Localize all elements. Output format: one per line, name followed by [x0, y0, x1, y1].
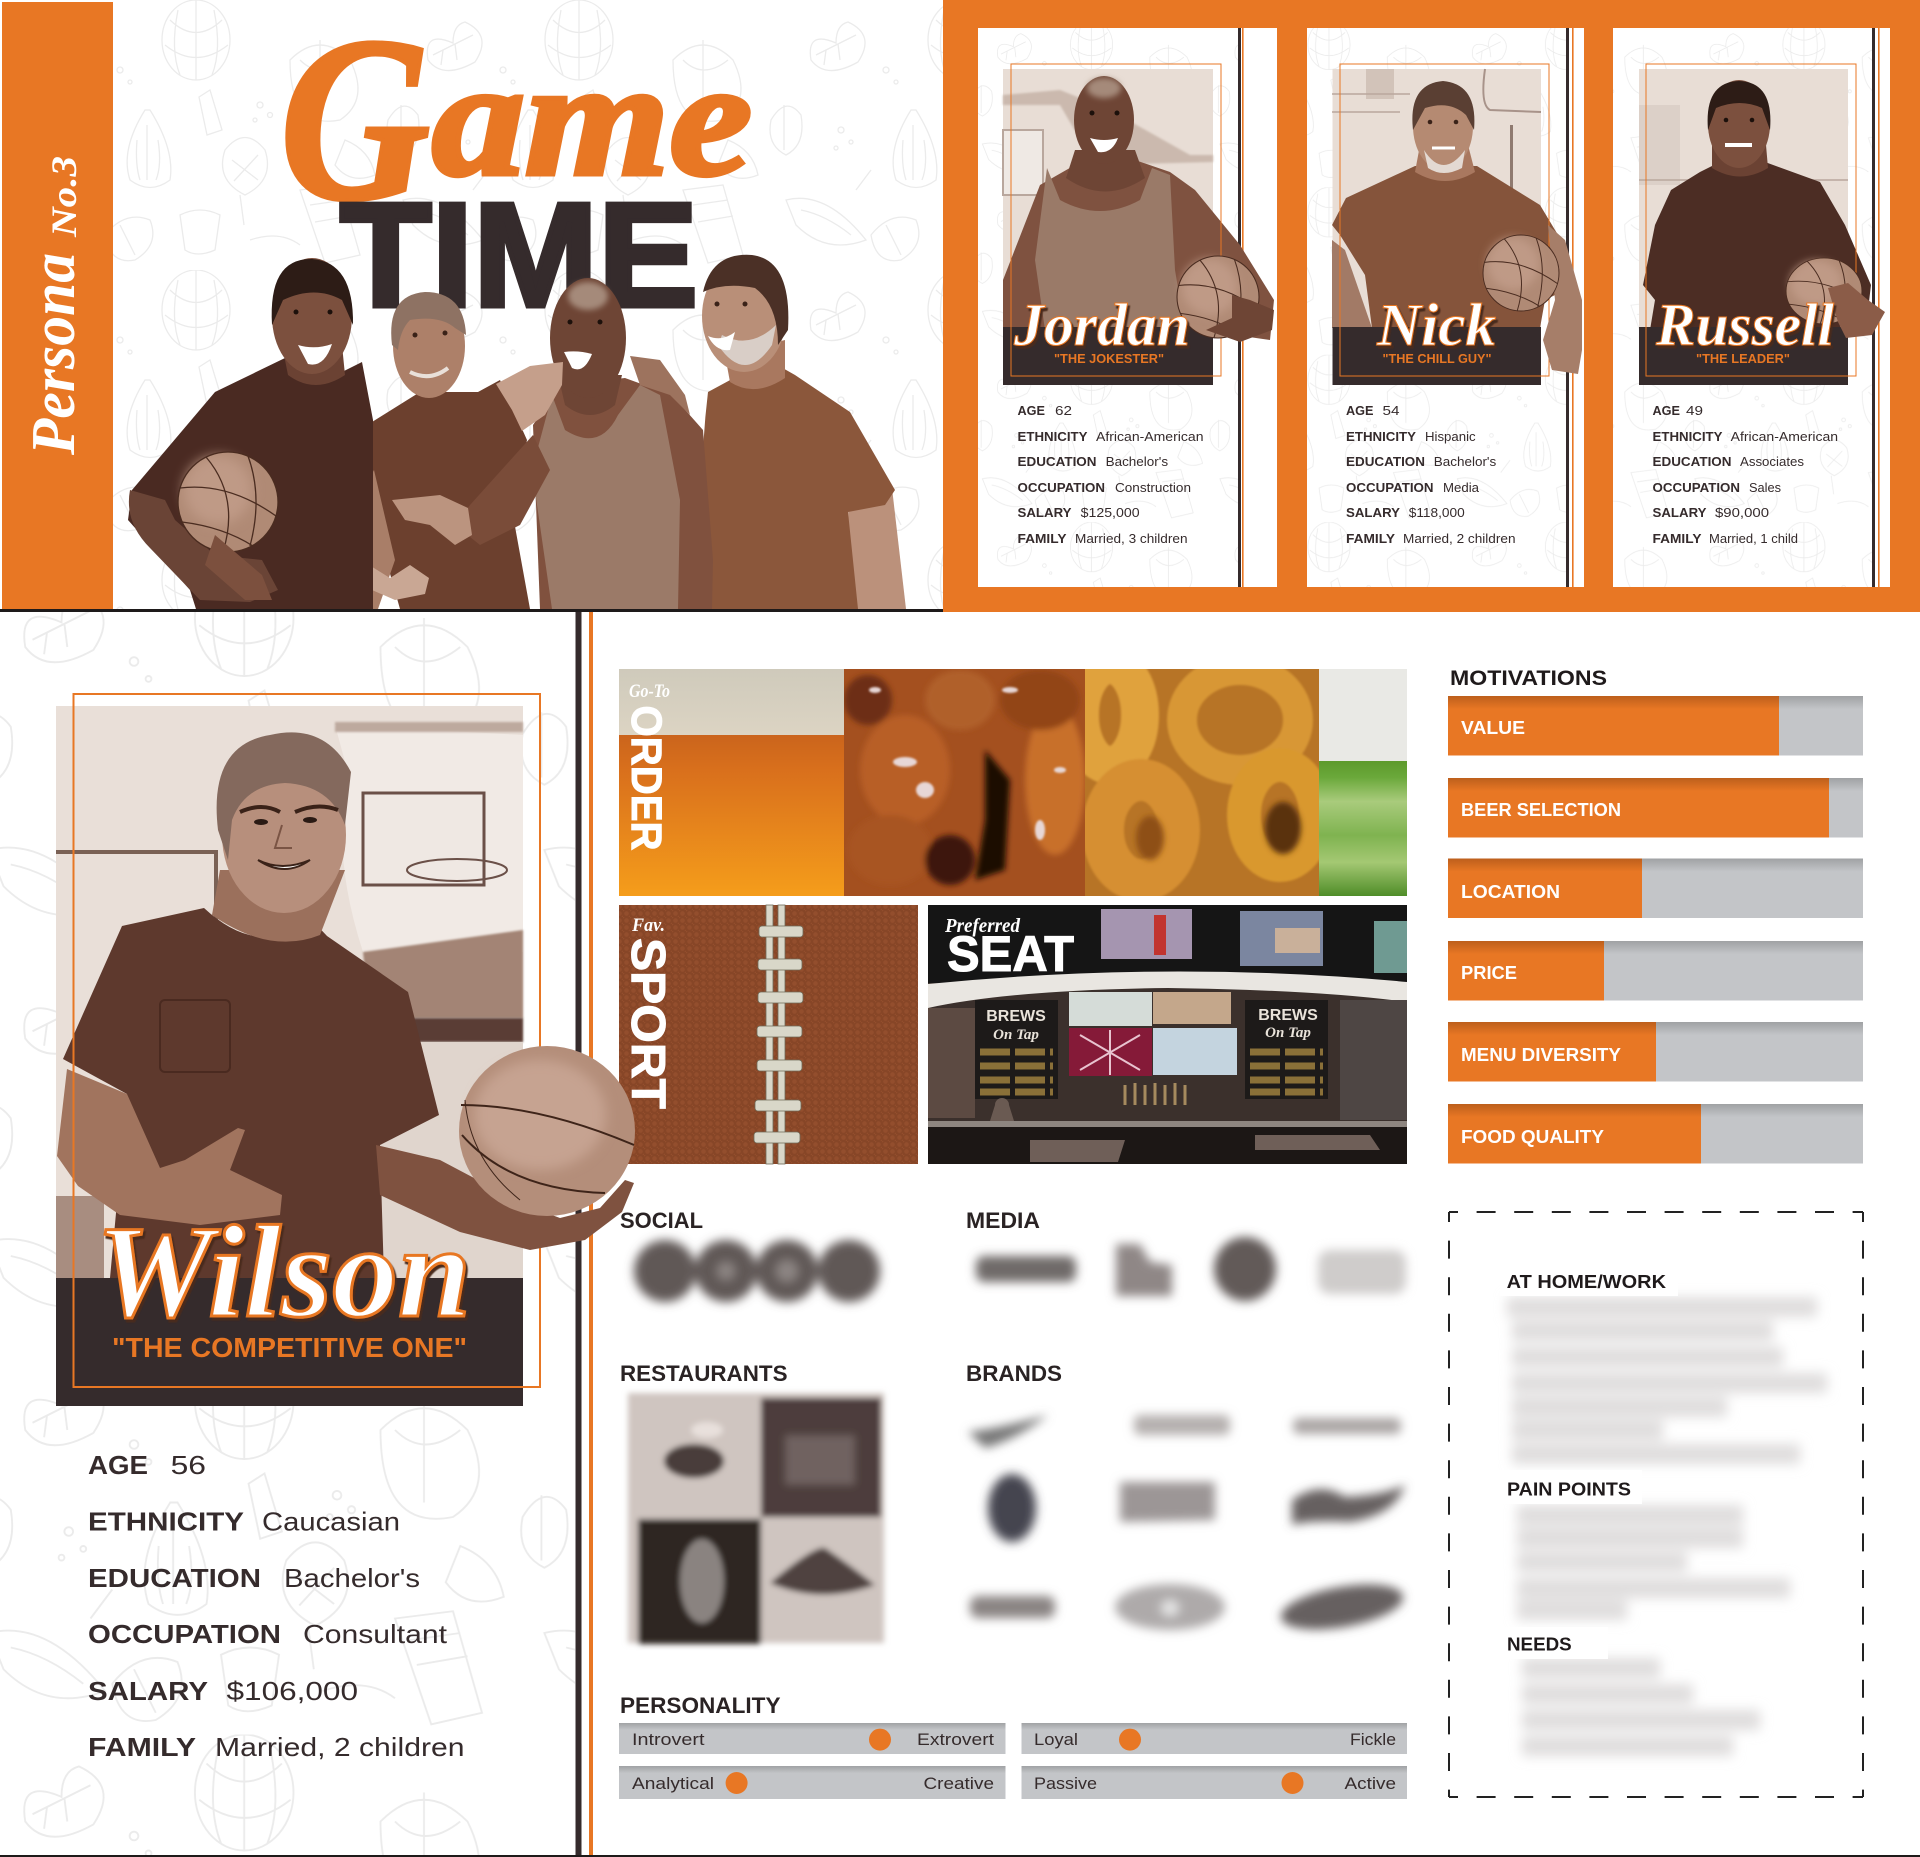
nickname: "THE COMPETITIVE ONE" [112, 1332, 467, 1363]
stats: ETHNICITY [1018, 430, 1088, 444]
left forearm [352, 470, 395, 609]
panel: social: SOCIAL [620, 1208, 703, 1233]
stats: Wilson: FAMILY [88, 1732, 196, 1762]
photo: wings [844, 669, 1085, 896]
dark name band [56, 1278, 523, 1406]
nickname: "THE CHILL GUY" [1382, 352, 1492, 366]
brews board left [975, 1000, 1058, 1099]
bartender [990, 1098, 1014, 1121]
stats: FAMILY [1652, 532, 1702, 546]
stats: Wilson: Consultant [303, 1619, 448, 1649]
name: Jordan: Jordan [1013, 292, 1190, 358]
stats: Wilson: ETHNICITY [88, 1506, 244, 1536]
panel: brands: BRANDS [966, 1361, 1062, 1386]
bar: location [1448, 858, 1863, 918]
panel: persona title [0, 0, 943, 610]
card: Russell [1613, 28, 1890, 587]
slider: passive to active [1022, 1766, 1407, 1799]
stats: Hispanic [1425, 430, 1476, 444]
stats: Media [1443, 481, 1479, 495]
orange frame [74, 694, 540, 1387]
brews board right [1245, 1000, 1328, 1099]
stats: 54 [1382, 404, 1400, 418]
bar: beer selection [1448, 778, 1863, 838]
panel: food order photos [619, 665, 1407, 896]
stats [1018, 404, 1204, 546]
man 3 [532, 278, 713, 609]
heading: needs [1500, 1627, 1608, 1659]
blurred brand logos [968, 1415, 1407, 1637]
title: Game: ame [432, 27, 752, 210]
panel: motivations: MOTIVATIONS [1450, 667, 1607, 690]
torso [63, 908, 439, 1278]
panel: restaurants [620, 1361, 884, 1644]
stats: OCCUPATION [1018, 481, 1105, 495]
label: Preferred Seat: Preferred [944, 915, 1021, 937]
stats: $125,000 [1081, 506, 1140, 520]
stats: SALARY [1652, 506, 1707, 520]
label: Go-To Order: ORDER [622, 706, 670, 850]
label: Go-To Order: Go-To [629, 681, 670, 702]
photo: ranch and celery [1319, 669, 1407, 896]
title: TIME: TIME [340, 173, 698, 338]
slider: analytical to creative: Analytical [632, 1774, 714, 1793]
stats: Wilson: AGE [88, 1450, 148, 1480]
portrait [1639, 64, 1885, 385]
stats [1652, 404, 1838, 546]
stats: OCCUPATION [1652, 481, 1740, 495]
laces [754, 905, 803, 1164]
panel: three persona cards [943, 0, 1920, 612]
taps [1125, 1083, 1185, 1105]
divider: top rule [0, 609, 943, 612]
panel: Wilson portrait [56, 694, 635, 1406]
man 4 [702, 255, 906, 609]
blurred media logos [976, 1237, 1406, 1301]
stats: Wilson: EDUCATION [88, 1563, 261, 1593]
bar: location: LOCATION [1461, 882, 1560, 902]
bar: food quality: FOOD QUALITY [1461, 1127, 1604, 1147]
bar: value [1448, 696, 1863, 756]
stats: EDUCATION [1018, 455, 1096, 469]
stats: Married, 3 children [1075, 532, 1188, 546]
stats: $90,000 [1715, 506, 1769, 520]
slider: introvert to extrovert [619, 1723, 1006, 1754]
court background [56, 722, 523, 1278]
stats: EDUCATION [1346, 455, 1425, 469]
panel: Wilson background [0, 612, 575, 1857]
side strip: persona number: No.3 [44, 156, 84, 238]
stats: ETHNICITY [1346, 430, 1417, 444]
bar: food quality [1448, 1104, 1863, 1164]
arm of man 3 across [455, 435, 550, 545]
basketball [459, 1046, 635, 1216]
photo: football [619, 905, 918, 1164]
panel: media [966, 1208, 1406, 1301]
bar counter and tables [928, 1124, 1407, 1164]
slider: introvert to extrovert: Introvert [632, 1730, 705, 1749]
blurred social icons [634, 1240, 880, 1302]
name: Wilson: Wilson [96, 1198, 471, 1345]
slider: passive to active: Active [1344, 1774, 1396, 1793]
stats: EDUCATION [1652, 455, 1732, 469]
centre screens [1069, 992, 1152, 1026]
brews board left: BREWS [986, 1008, 1046, 1025]
stats: Bachelor's [1434, 455, 1496, 469]
stats: AGE [1652, 404, 1680, 418]
nickname: "THE LEADER" [1696, 352, 1790, 366]
hand on shoulder [630, 356, 690, 415]
side strip: persona number: Persona [20, 253, 88, 456]
slider: introvert to extrovert: Extrovert [917, 1730, 994, 1749]
label: Fav. Sport: Fav. [631, 915, 665, 936]
panel: restaurants: RESTAURANTS [620, 1361, 788, 1386]
slider: loyal to fickle: Fickle [1350, 1730, 1396, 1749]
nickname: "THE JOKESTER" [1054, 352, 1164, 366]
left arm and hand [57, 1069, 282, 1225]
stats: AGE [1346, 404, 1374, 418]
bar: price [1448, 941, 1863, 1000]
stats [1346, 404, 1516, 546]
name: Nick: Nick [1376, 292, 1496, 358]
heading: pain points [1500, 1470, 1642, 1504]
blurred note lines [1507, 1297, 1827, 1756]
stats: Wilson: $106,000 [226, 1676, 358, 1706]
heading: at home/work [1500, 1270, 1678, 1296]
bar: beer selection: BEER SELECTION [1461, 800, 1621, 820]
stats: African-American [1096, 430, 1204, 444]
photo: beer [619, 669, 844, 896]
stats: Bachelor's [1106, 455, 1168, 469]
stats: Associates [1740, 455, 1804, 469]
panel: media: MEDIA [966, 1208, 1040, 1233]
brews board right: On Tap [1265, 1025, 1311, 1041]
bar: price: PRICE [1461, 963, 1517, 983]
stats: AGE [1018, 404, 1045, 418]
right arm and hand [376, 1145, 634, 1250]
panel: personality: PERSONALITY [620, 1693, 781, 1718]
side strip: persona number [2, 2, 113, 610]
portrait [1003, 64, 1274, 385]
panel: dashed notes box [1449, 1212, 1863, 1797]
bar: menu diversity: MENU DIVERSITY [1461, 1045, 1621, 1065]
blurred restaurant logos [628, 1393, 884, 1644]
label: Preferred Seat: SEAT [947, 926, 1074, 982]
stats: Sales [1749, 481, 1781, 495]
panel: motivations [1448, 667, 1863, 1164]
divider: bottom rule [0, 1855, 1920, 1857]
stats: Wilson: OCCUPATION [88, 1619, 281, 1649]
ceiling band [928, 971, 1407, 1008]
stats: Wilson [88, 1450, 464, 1762]
stats: African-American [1731, 430, 1838, 444]
stats: 49 [1686, 404, 1703, 418]
stats: Married, 2 children [1403, 532, 1516, 546]
heading: at home/work: AT HOME/WORK [1507, 1271, 1667, 1292]
stats: Construction [1115, 481, 1191, 495]
slider: passive to active: Passive [1034, 1774, 1097, 1793]
stats: Wilson: SALARY [88, 1676, 208, 1706]
side wall [928, 1008, 975, 1118]
name: Russell: Russell [1655, 292, 1834, 358]
panel: personality [619, 1693, 1407, 1799]
group photo of four men [128, 255, 906, 609]
photo: preferred seat bar [928, 905, 1407, 1164]
brews board left: On Tap [993, 1027, 1039, 1043]
stats: Wilson: Married, 2 children [215, 1732, 464, 1762]
title: Game [280, 0, 752, 249]
divider: orange rule [589, 612, 593, 1857]
upper screens [1101, 909, 1192, 959]
stats: ETHNICITY [1652, 430, 1723, 444]
stats: 62 [1055, 404, 1072, 418]
photo: onion rings [1080, 665, 1319, 896]
stats: FAMILY [1346, 532, 1396, 546]
stats: Wilson: 56 [171, 1450, 206, 1480]
heading: needs: NEEDS [1507, 1634, 1572, 1655]
slider: loyal to fickle [1022, 1723, 1407, 1754]
portrait [1332, 64, 1582, 385]
bar: value: VALUE [1461, 718, 1525, 738]
slider: analytical to creative [619, 1766, 1006, 1799]
man 2 [352, 292, 563, 609]
card: Nick [1307, 28, 1584, 587]
label: Fav. Sport: SPORT [621, 938, 674, 1109]
bar: menu diversity [1448, 1022, 1863, 1082]
card: Jordan [978, 28, 1277, 587]
neck and head [212, 732, 351, 942]
stats: Married, 1 child [1709, 532, 1798, 546]
stats: OCCUPATION [1346, 481, 1434, 495]
stats: Wilson: Caucasian [262, 1506, 400, 1536]
slider: loyal to fickle: Loyal [1034, 1730, 1078, 1749]
man 1 with basketball [128, 258, 373, 609]
stats: SALARY [1346, 506, 1401, 520]
slider: analytical to creative: Creative [924, 1774, 994, 1793]
divider: dark rule [576, 612, 582, 1857]
stats: $118,000 [1409, 506, 1465, 520]
panel: brands [966, 1361, 1407, 1637]
stats: FAMILY [1018, 532, 1067, 546]
hands [392, 495, 472, 545]
stats: SALARY [1018, 506, 1072, 520]
brews board right: BREWS [1258, 1007, 1318, 1024]
heading: pain points: PAIN POINTS [1507, 1479, 1631, 1500]
panel: social [620, 1208, 880, 1302]
stats: Wilson: Bachelor's [284, 1563, 420, 1593]
